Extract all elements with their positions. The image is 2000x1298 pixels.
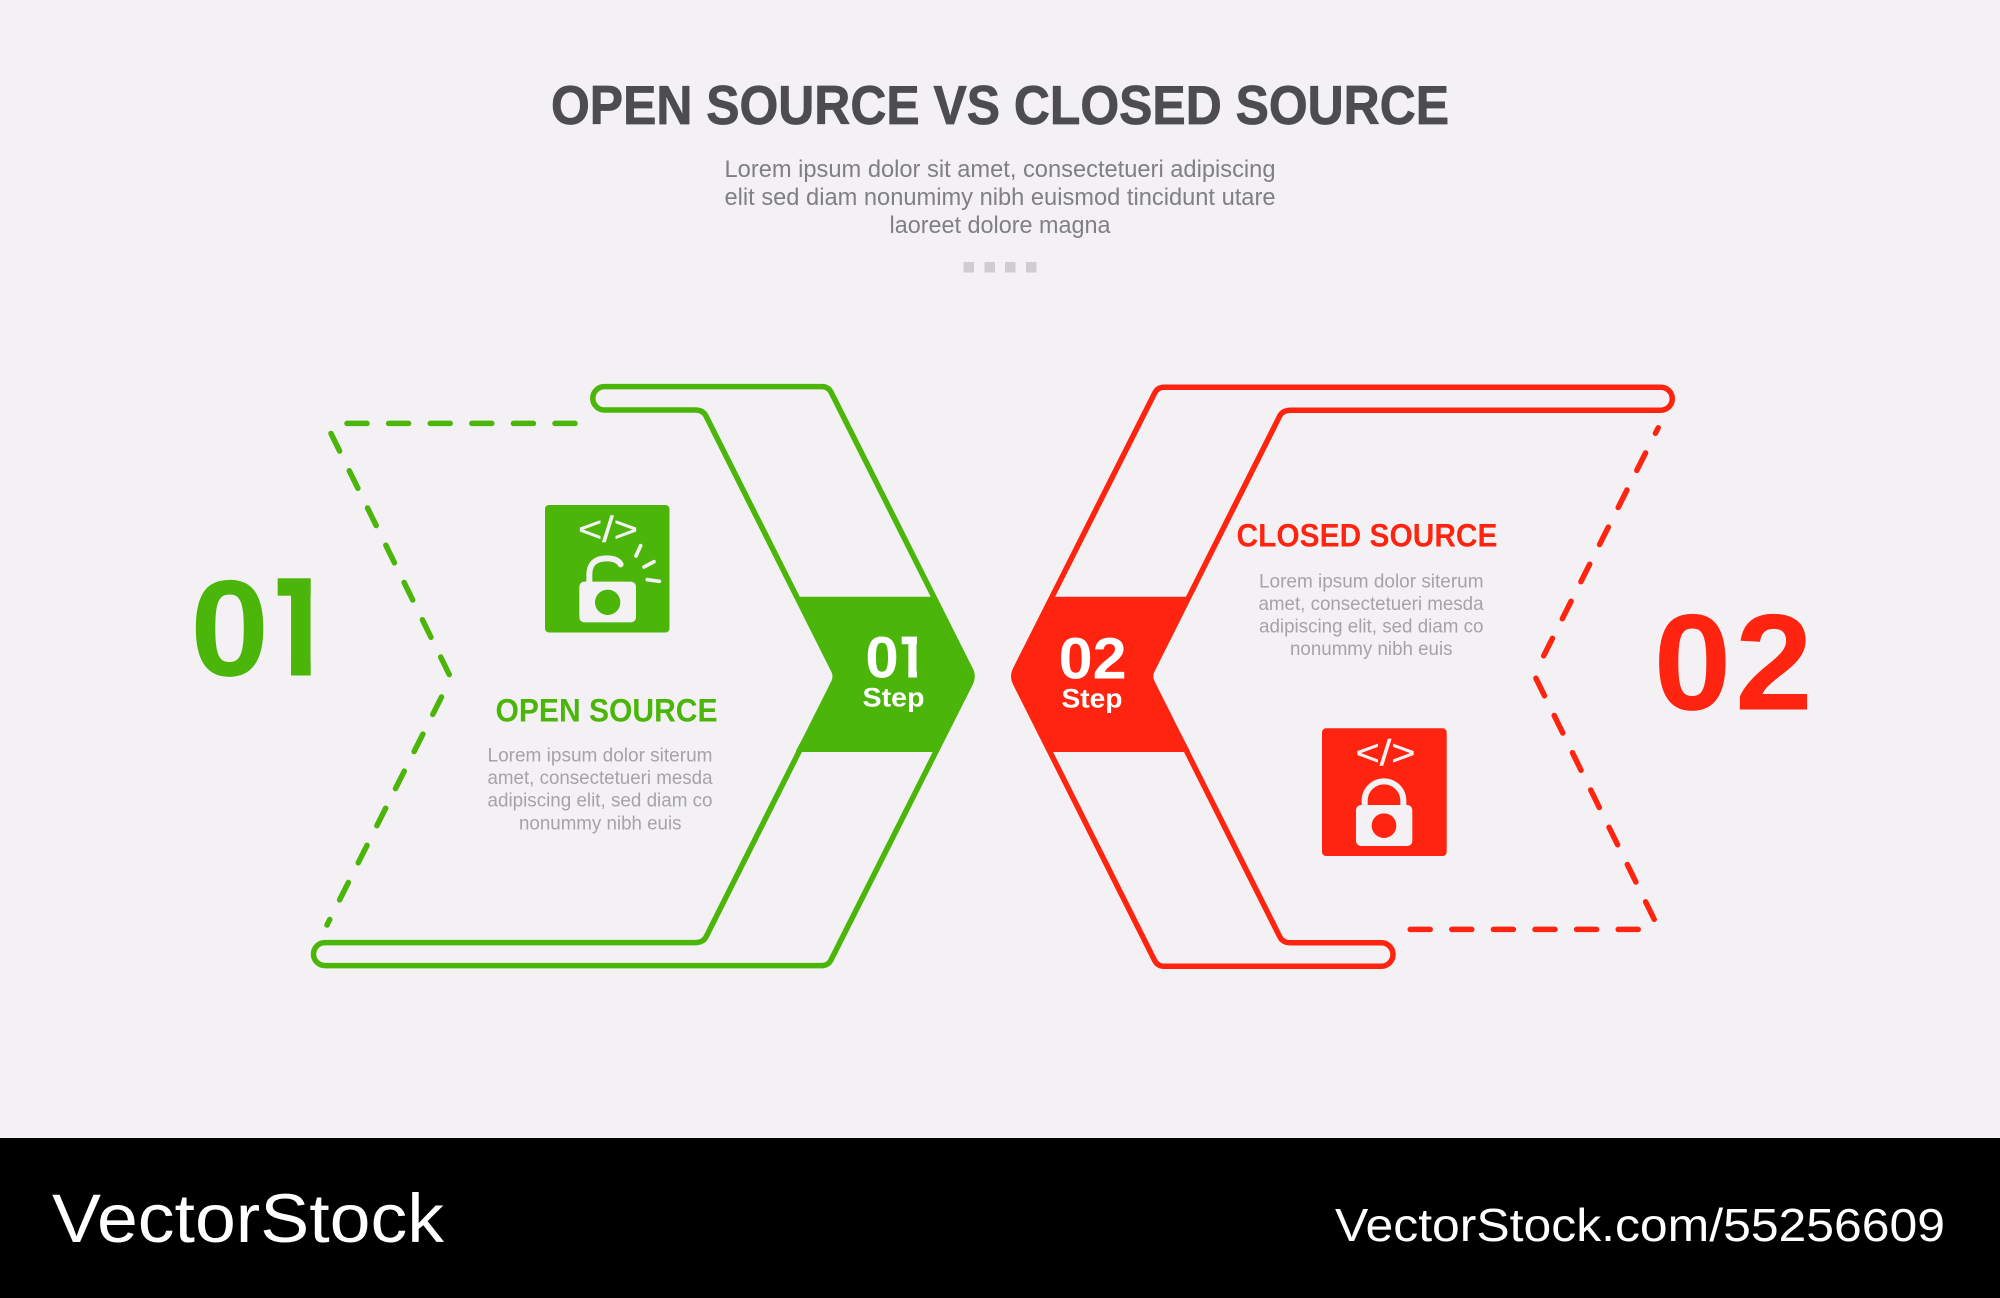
subtitle text: elit sed diam nonumimy nibh euismod tincidunt utare [724, 184, 1276, 211]
panel: open source [190, 387, 972, 966]
step badge: 02: Step [1062, 684, 1122, 714]
step badge: 01: Step [862, 682, 924, 712]
arrow outline: green [314, 387, 972, 966]
body text: open source: amet, consectetueri mesda [488, 767, 713, 789]
pagination dots [964, 262, 1036, 272]
body text: open source: adipiscing elit, sed diam co [488, 790, 713, 812]
icon: closed padlock with code: </> [1356, 732, 1416, 773]
body text: closed source: nonummy nibh euis [1290, 638, 1453, 660]
heading: closed source: CLOSED SOURCE [1236, 518, 1498, 554]
body text: closed source [1258, 570, 1484, 660]
subtitle text [724, 156, 1276, 239]
body text: closed source: adipiscing elit, sed diam co [1259, 616, 1484, 638]
dashed outline: red [1410, 428, 1658, 929]
icon: closed padlock with code [1322, 728, 1447, 856]
icon: open padlock with code: </> [578, 508, 638, 550]
panel: closed source [1014, 387, 1813, 966]
title: OPEN SOURCE VS CLOSED SOURCE [551, 74, 1449, 136]
body text: open source [488, 744, 713, 834]
step badge: 01 [797, 598, 972, 751]
dashed outline: green [327, 423, 575, 925]
large number 02: 02 [1654, 587, 1813, 739]
subtitle text: laoreet dolore magna [890, 212, 1111, 239]
step badge: 02 [1014, 598, 1189, 751]
large number 01: 01 [190, 552, 337, 705]
step badge: 02: 02 [1059, 626, 1127, 691]
header block [551, 74, 1449, 272]
arrow outline: red [1014, 387, 1672, 966]
heading: open source: OPEN SOURCE [496, 692, 718, 728]
body text: open source: Lorem ipsum dolor siterum [488, 744, 712, 766]
step badge: 01: 01 [865, 625, 928, 690]
body text: open source: nonummy nibh euis [519, 812, 682, 834]
large number 01 [196, 578, 311, 677]
footer url: VectorStock.com/55256609 [1335, 1199, 1945, 1251]
subtitle text: Lorem ipsum dolor sit amet, consectetueri adipiscing [724, 156, 1276, 183]
body text: closed source: Lorem ipsum dolor siterum [1259, 570, 1484, 592]
footer brand: VectorStock [52, 1180, 445, 1257]
icon: open padlock with code [545, 505, 670, 632]
footer bar [0, 1138, 2000, 1298]
body text: closed source: amet, consectetueri mesda [1258, 593, 1484, 615]
